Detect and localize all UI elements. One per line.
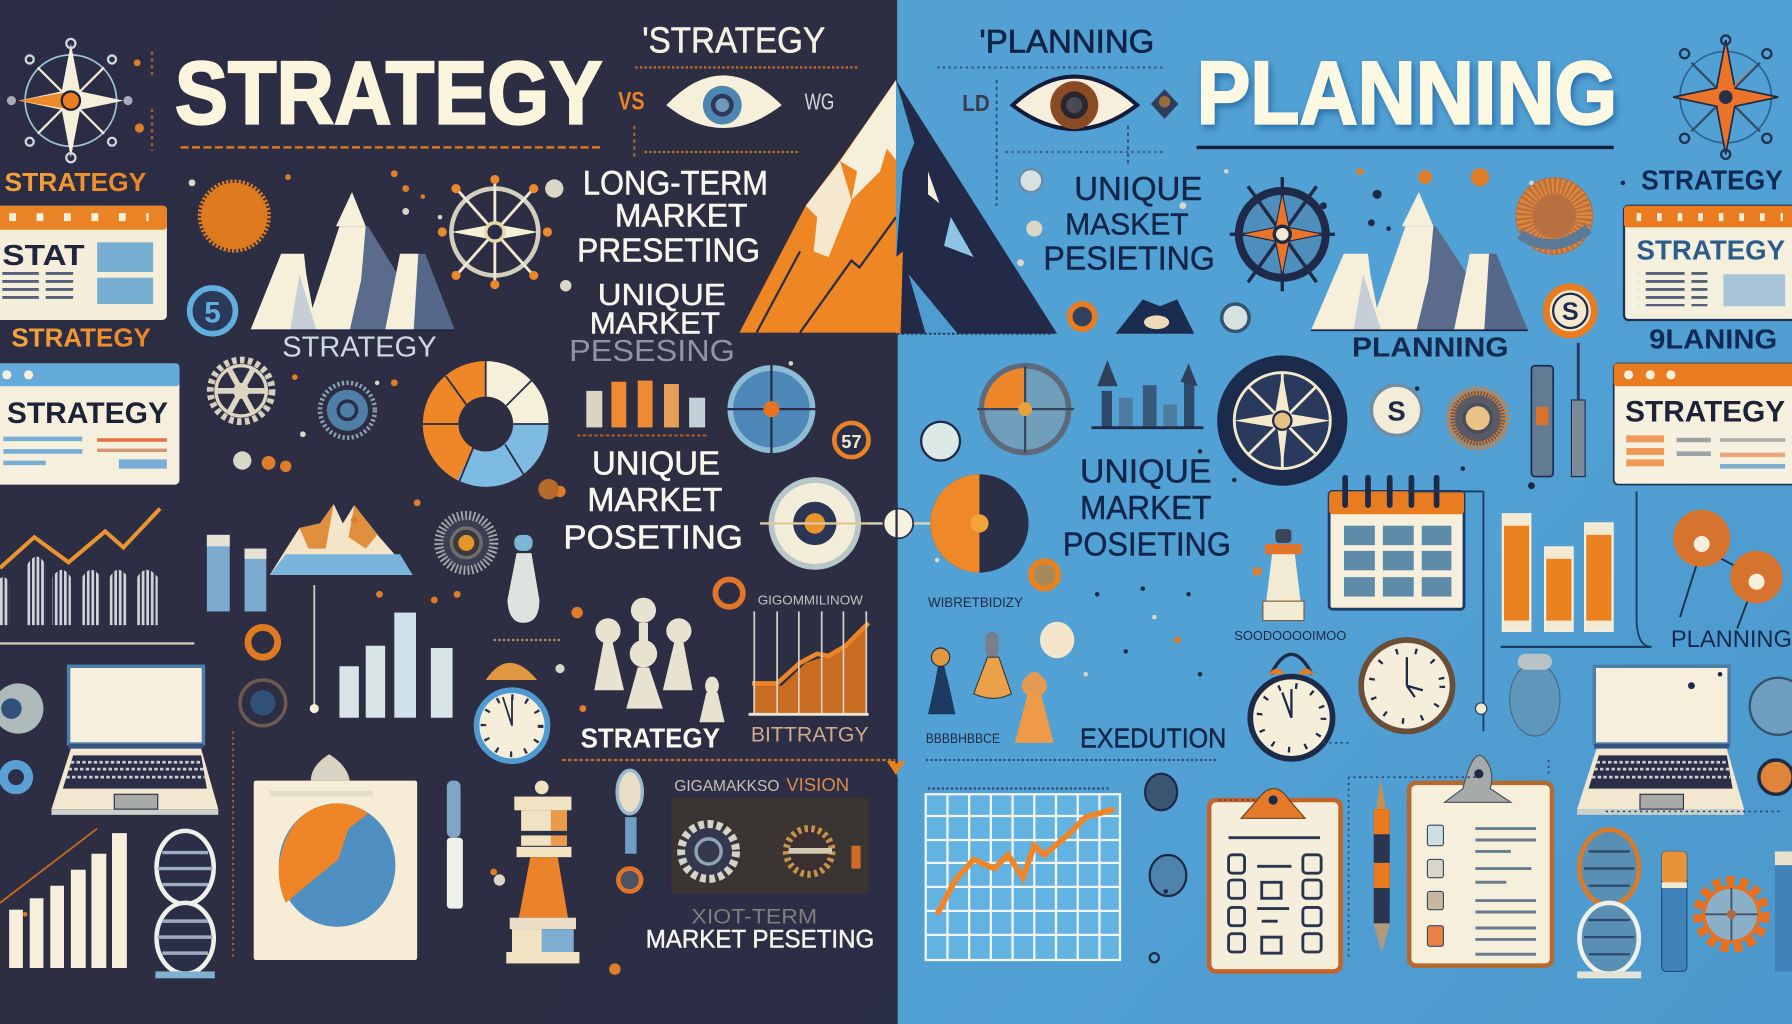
text block: unique market posieting: UNIQUE bbox=[1080, 453, 1211, 490]
text block: unique market poseting: UNIQUE bbox=[592, 445, 720, 482]
icon: orange badge bbox=[1031, 561, 1058, 589]
chart: small bars bbox=[586, 381, 705, 427]
icon: s badge cream bbox=[1371, 385, 1422, 435]
text block: unique masket pesieting: UNIQUE bbox=[1074, 171, 1202, 208]
text block: vision: VISION bbox=[786, 774, 849, 795]
label: vs: VS bbox=[618, 88, 645, 116]
icon: laptop right bbox=[1577, 666, 1744, 815]
icon: tool tubes bbox=[1531, 343, 1585, 477]
icon: seal badge bbox=[320, 383, 375, 438]
icon: small badges row bbox=[1019, 169, 1249, 334]
panel: strategy header bbox=[7, 20, 859, 162]
card: strategy bbox=[0, 363, 179, 485]
icon: clipboard notes bbox=[1409, 755, 1552, 966]
text block: unique market pesesing bbox=[569, 277, 735, 368]
icon: magnifier bbox=[617, 770, 642, 891]
text block: short-term market bbox=[646, 903, 874, 953]
icon: orange sphere bbox=[201, 183, 267, 249]
icon: ship wheel left bbox=[438, 175, 552, 289]
icon: pen right bbox=[1374, 779, 1390, 953]
icon: clock right 1 bbox=[1250, 654, 1333, 759]
chart: orange tubes bbox=[1408, 491, 1651, 731]
icon: right tube bbox=[1775, 851, 1792, 971]
chart: orange area: GIGOMMILINOW bbox=[758, 594, 863, 608]
icon: s badge cream: S bbox=[1387, 396, 1406, 427]
left panel background bbox=[0, 0, 897, 1024]
text block: unique masket pesieting: MASKET bbox=[1065, 206, 1189, 241]
card: strategy right bottom: STRATEGY bbox=[1625, 396, 1785, 429]
text block: long-term market preseting bbox=[577, 164, 768, 270]
card: strategy right top bbox=[1624, 206, 1792, 320]
chart: rising bars bbox=[0, 829, 127, 968]
text block: unique masket pesieting bbox=[1043, 171, 1215, 278]
label: right vs: LD bbox=[962, 90, 990, 116]
icon: pawn group bbox=[594, 598, 725, 722]
title: strategy: STRATEGY bbox=[175, 42, 602, 142]
icon: ship wheel right bbox=[1230, 177, 1335, 291]
icon: orange gear bbox=[1698, 881, 1765, 947]
text block: short-term market: XIOT-TERM bbox=[691, 903, 817, 928]
panel: planning lower bbox=[897, 334, 1792, 978]
connector node bbox=[869, 509, 949, 538]
icon: pawn blue bbox=[507, 535, 539, 623]
icon: eye left bbox=[666, 75, 782, 128]
icon: clipboard checklist bbox=[1209, 789, 1341, 971]
heading: small planning: 'PLANNING bbox=[979, 24, 1154, 60]
text block: short-term market: MARKET PESETING bbox=[646, 925, 874, 953]
panel: strategy cards bbox=[0, 167, 179, 485]
text block: unique market pesesing: PESESING bbox=[569, 333, 735, 368]
text block: unique market pesesing: UNIQUE bbox=[598, 277, 726, 312]
text block: long-term market preseting: LONG-TERM bbox=[583, 164, 768, 202]
text block: unique market poseting: POSETING bbox=[563, 520, 743, 557]
panel: planning upper bbox=[921, 165, 1792, 563]
icon: dna right bbox=[1577, 830, 1641, 978]
icon: badge 5 left: 5 bbox=[204, 296, 221, 329]
icon: small lens pair bbox=[1145, 774, 1186, 962]
card: strategy: STRATEGY bbox=[7, 397, 168, 430]
icon: dark mountain bbox=[896, 80, 1057, 334]
icon: small diamond eye bbox=[1151, 89, 1178, 119]
chart: donut bbox=[423, 361, 549, 487]
icon: gear left bbox=[210, 360, 272, 422]
icon: blue tube bbox=[1662, 851, 1687, 971]
label: ws: WG bbox=[805, 89, 834, 115]
icon: target cream bbox=[760, 480, 869, 567]
chart: orange area bbox=[749, 594, 869, 714]
text block: unique market poseting bbox=[563, 445, 743, 557]
label: 9laning: 9LANING bbox=[1649, 324, 1777, 355]
chart: grid line bbox=[926, 794, 1120, 960]
icon: clock left bbox=[477, 663, 547, 761]
panel: strategy centre icons bbox=[190, 80, 1057, 573]
icon: orange mountain bbox=[739, 80, 896, 333]
icon: eye right bbox=[1013, 77, 1137, 129]
icon: compass right bbox=[1673, 35, 1778, 159]
title: planning: PLANNING bbox=[1197, 42, 1617, 142]
label: strategy mountains: STRATEGY bbox=[282, 332, 437, 364]
text block: unique market posieting bbox=[1063, 453, 1231, 563]
icon: pieces bbox=[928, 622, 1074, 743]
right panel background bbox=[897, 0, 1792, 1024]
text block: unique market posieting: MARKET bbox=[1080, 490, 1211, 527]
label: execution: EXEDUTION bbox=[1080, 722, 1226, 753]
icon: small mountain bbox=[270, 504, 413, 575]
text block: vision: GIGAMAKKSO bbox=[674, 778, 779, 795]
chart: trend with striped columns bbox=[0, 509, 194, 643]
icon: badge s left bbox=[921, 422, 960, 461]
panel: strategy lower bbox=[0, 504, 905, 978]
icon: chess piece right bbox=[1263, 529, 1304, 621]
label: strategy right: STRATEGY bbox=[1641, 165, 1783, 196]
icon: compass left bbox=[7, 39, 133, 162]
chart: blue tubes bbox=[207, 535, 266, 611]
icon: right edge badges bbox=[1750, 678, 1792, 794]
icon: target blue bbox=[722, 363, 823, 455]
label: tiny left: BBBBHBBCE bbox=[926, 731, 1000, 746]
icon: left eye badge bbox=[0, 683, 43, 794]
icon: s badge orange: S bbox=[1562, 298, 1579, 326]
icon: chess king bbox=[506, 781, 579, 963]
icon: sun badge bbox=[439, 515, 494, 570]
label: bittratgy: BITTRATGY bbox=[751, 722, 869, 747]
icon: mountains right bbox=[1311, 192, 1528, 330]
text block: long-term market preseting: PRESETING bbox=[577, 233, 760, 270]
text block: unique market poseting: MARKET bbox=[587, 482, 722, 519]
text block: unique market posieting: POSIETING bbox=[1063, 526, 1231, 563]
label: planning right: PLANNING bbox=[1671, 626, 1792, 653]
icon: half split circle bbox=[930, 474, 1029, 573]
panel: planning header bbox=[937, 24, 1778, 206]
icon: orange ring badges bbox=[240, 579, 743, 726]
icon: dna left bbox=[155, 831, 215, 978]
icon: sun badge orange bbox=[1450, 391, 1505, 446]
chart: cream bars bbox=[310, 585, 453, 718]
text block: unique masket pesieting: PESIETING bbox=[1043, 241, 1215, 278]
text block: long-term market preseting: MARKET bbox=[615, 197, 747, 233]
icon: nodes bbox=[1673, 510, 1783, 629]
icon: laptop left bbox=[51, 666, 218, 815]
label: orange strategy: STRATEGY bbox=[5, 167, 147, 197]
icon: mountains left bbox=[250, 192, 455, 330]
icon: clock right 2 bbox=[1361, 640, 1453, 731]
chart: dark towers bbox=[1091, 360, 1203, 429]
icon: target right bbox=[977, 366, 1074, 453]
heading: small strategy: 'STRATEGY bbox=[642, 20, 825, 61]
icon: badge 57: 57 bbox=[841, 431, 862, 452]
card: strategy right bottom bbox=[1614, 363, 1792, 485]
icon: mesh sphere bbox=[1515, 177, 1593, 255]
card: stat: STAT bbox=[2, 240, 85, 272]
card: strategy right top: STRATEGY bbox=[1637, 234, 1785, 265]
card: stat bbox=[0, 206, 167, 320]
icon: badge 57 bbox=[834, 423, 869, 457]
icon: lens jar bbox=[1510, 654, 1560, 736]
text block: unique market pesesing: MARKET bbox=[590, 306, 720, 341]
icon: badge 5 left bbox=[190, 288, 235, 334]
label: tiny heading: WIBRETBIDIZY bbox=[928, 595, 1023, 610]
text block: vision bbox=[671, 774, 869, 894]
icon: divider arrow bbox=[887, 761, 905, 775]
icon: clipboard with pie bbox=[254, 754, 417, 960]
icon: pen left bbox=[447, 781, 463, 909]
icon: calendar bbox=[1329, 478, 1464, 609]
label: orange strategy 2: STRATEGY bbox=[11, 322, 151, 352]
icon: s badge orange bbox=[1546, 287, 1594, 335]
label: planning mountains: PLANNING bbox=[1352, 332, 1509, 363]
label: strategy pawns: STRATEGY bbox=[581, 722, 720, 753]
label: tiny center: SOODOOOOIMOO bbox=[1234, 629, 1347, 643]
icon: ship wheel dark bbox=[1217, 355, 1347, 486]
